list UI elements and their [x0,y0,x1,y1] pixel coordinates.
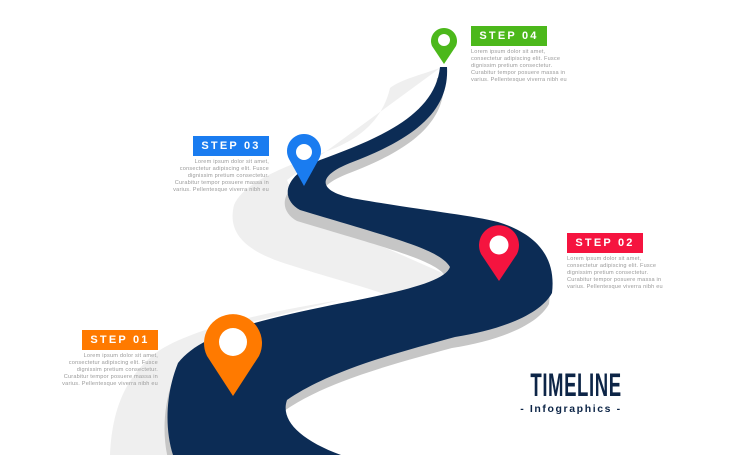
road shadow [165,78,550,455]
text: step 04 [471,49,567,83]
text: step 02: Lorem ipsum dolor sit amet, [567,256,641,262]
title [520,367,622,415]
text: step 01: dignissim pretium consectetur. [77,367,158,373]
label: step 04: STEP 04 [479,30,539,42]
text: step 03: varius. Pellentesque viverra nibh eu [173,187,269,193]
label: step 02: STEP 02 [575,237,635,249]
text: step 02: consectetur adipiscing elit. Fusce [567,263,656,269]
text: step 03 [173,159,269,193]
text: step 04: consectetur adipiscing elit. Fusce [471,56,560,62]
text: step 04: Lorem ipsum dolor sit amet, [471,49,545,55]
text: step 01 [62,353,158,387]
text: step 02 [567,256,663,290]
label: step 03 [193,136,269,156]
icon: pin 03 [287,134,321,186]
text: step 04: Curabitur tempor posuere massa in [471,70,565,76]
text: step 02: dignissim pretium consectetur. [567,270,648,276]
text: step 02: Curabitur tempor posuere massa in [567,277,661,283]
text: step 01: Lorem ipsum dolor sit amet, [84,353,158,359]
label: step 01 [82,330,158,350]
text: step 03: Curabitur tempor posuere massa in [175,180,269,186]
icon: pin 02 [479,225,519,281]
label: step 01: STEP 01 [90,334,150,346]
road [168,67,553,455]
text: step 01: varius. Pellentesque viverra nibh eu [62,381,158,387]
label: step 03: STEP 03 [201,140,261,152]
text: step 01: consectetur adipiscing elit. Fusce [69,360,158,366]
icon: pin 01 [204,314,262,396]
text: step 02: varius. Pellentesque viverra nibh eu [567,284,663,290]
title: - Infographics - [520,403,622,415]
text: step 01: Curabitur tempor posuere massa in [64,374,158,380]
text: step 03: consectetur adipiscing elit. Fusce [180,166,269,172]
title: TIMELINE [530,367,622,403]
text: step 04: dignissim pretium consectetur. [471,63,552,69]
label: step 04 [471,26,547,46]
text: step 03: dignissim pretium consectetur. [188,173,269,179]
text: step 03: Lorem ipsum dolor sit amet, [195,159,269,165]
light background shadow [110,68,447,455]
label: step 02 [567,233,643,253]
icon: pin 04 [431,28,457,64]
text: step 04: varius. Pellentesque viverra nibh eu [471,77,567,83]
